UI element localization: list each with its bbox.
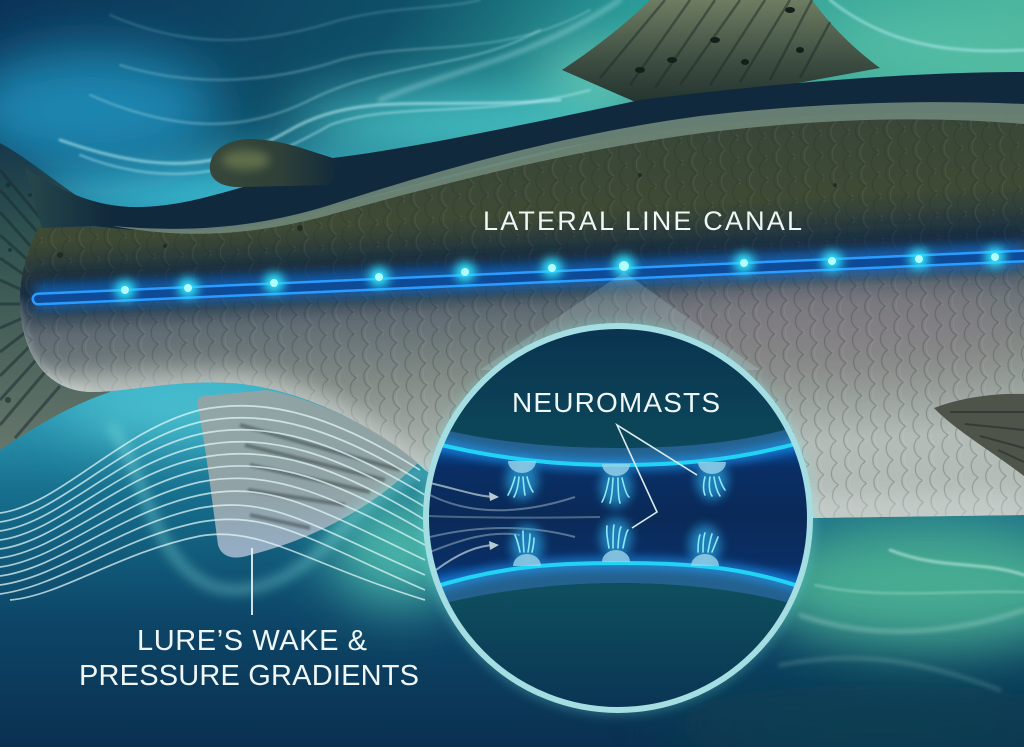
lower right current lines — [780, 550, 1024, 690]
neuromast leader lines — [617, 425, 697, 528]
sensory pores — [115, 247, 1005, 300]
magnifier cone — [480, 272, 760, 370]
title label: lateral line canal: LATERAL LINE CANAL — [483, 206, 802, 236]
wake label: LURE’S WAKE & — [137, 625, 367, 657]
silver dorsal stripe — [112, 102, 1024, 234]
swirl glow in wake — [110, 425, 425, 590]
tail fin — [0, 143, 125, 450]
fish body — [20, 113, 1024, 518]
lateral line canal — [35, 247, 1024, 300]
wake and pressure gradient lines — [0, 406, 425, 600]
anal fin — [197, 390, 418, 558]
wake label: PRESSURE GRADIENTS — [79, 660, 419, 692]
pectoral fin — [934, 394, 1024, 476]
wake leader line — [251, 548, 253, 615]
bottom neuromasts — [511, 518, 721, 566]
adipose fin — [210, 139, 340, 187]
flow arrows — [428, 483, 600, 570]
canal lumen — [429, 446, 807, 583]
dark back of fish — [25, 72, 1024, 234]
background: upper water — [0, 0, 1024, 340]
lower canal wall — [442, 565, 794, 602]
magnifier inset: neuromasts — [420, 320, 816, 716]
dorsal fin — [562, 0, 880, 104]
upper water current lines — [60, 0, 1024, 174]
top neuromasts — [506, 460, 728, 507]
background: lower water — [0, 380, 1024, 747]
scale spots — [57, 173, 837, 258]
upper canal wall — [444, 430, 792, 463]
wake label — [79, 625, 419, 692]
neuromasts label: NEUROMASTS — [512, 387, 720, 418]
